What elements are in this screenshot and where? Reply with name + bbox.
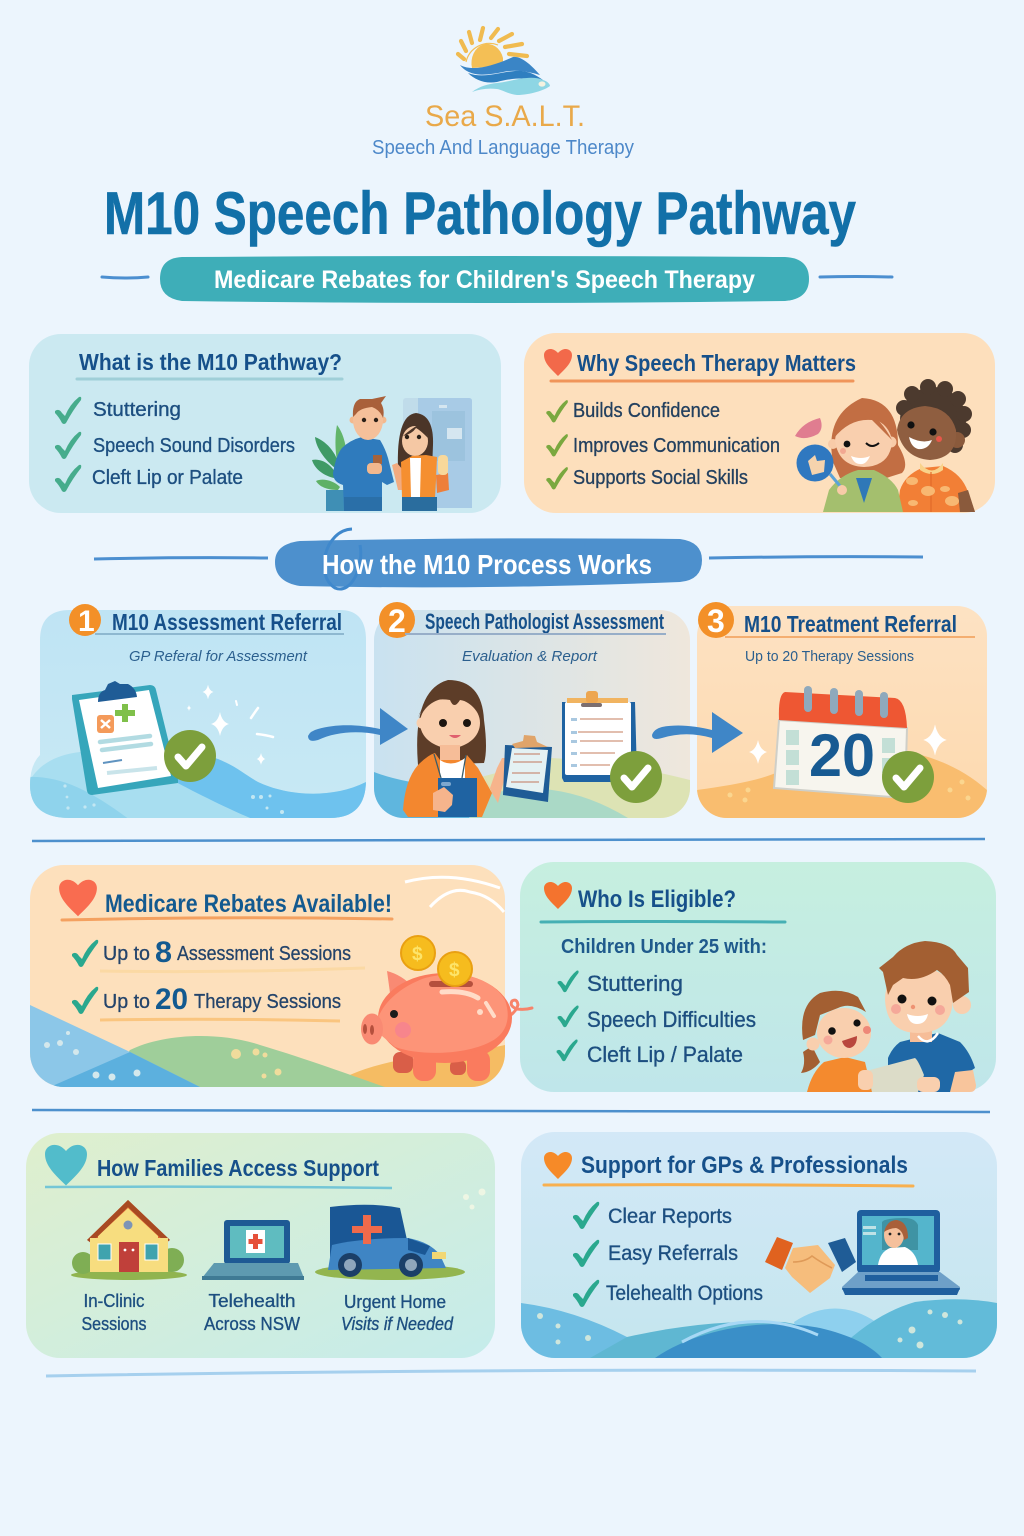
icon: small clipboard	[503, 735, 552, 802]
rebate item: therapy sessions: Up to	[103, 991, 150, 1013]
number badge	[379, 602, 415, 639]
checklist: Builds Confidence	[573, 400, 720, 422]
illustration: piggy bank with coins: $	[412, 944, 423, 965]
panel: what is the M10 pathway	[29, 334, 501, 513]
label	[82, 1291, 146, 1334]
subtext: Evaluation & Report	[462, 648, 598, 665]
illustration: handshake and telehealth laptop	[765, 1210, 960, 1295]
section heading: how the M10 process works: How the M10 Process Works	[322, 549, 652, 580]
panel: step 1	[25, 604, 366, 820]
panel: why speech therapy matters	[524, 333, 995, 513]
checklist	[55, 397, 295, 492]
section heading: how the M10 process works	[275, 529, 702, 589]
subtitle banner	[160, 256, 809, 303]
rebate item: assessment sessions: Up to	[103, 943, 150, 965]
rebate item: assessment sessions	[72, 936, 351, 969]
icon: heart	[544, 1152, 572, 1179]
icon: heart	[544, 882, 572, 909]
illustration: piggy bank with coins: $	[449, 960, 460, 981]
checklist: Telehealth Options	[606, 1282, 763, 1305]
number badge: 3	[707, 603, 725, 639]
brand tagline: Speech And Language Therapy	[372, 137, 634, 159]
icon: heart	[45, 1145, 87, 1186]
icon: calendar: 20	[809, 722, 875, 789]
panel: how families access support	[26, 1133, 495, 1358]
illustration: piggy bank with coins	[361, 936, 532, 1081]
checklist: Stuttering	[587, 971, 683, 996]
label	[204, 1291, 300, 1334]
lead text: Children Under 25 with:	[561, 936, 767, 958]
checklist: Speech Difficulties	[587, 1007, 756, 1032]
heading: How Families Access Support	[97, 1155, 379, 1181]
checklist: Improves Communication	[573, 435, 780, 457]
panel: step 2	[374, 602, 690, 818]
icon: sun and fish logo	[458, 28, 550, 95]
number badge	[69, 604, 101, 638]
heading: Speech Pathologist Assessment	[425, 609, 664, 634]
rebate item: assessment sessions: Assessment Sessions	[177, 943, 351, 965]
illustration: boy and girl with tablet	[801, 941, 976, 1092]
icon: large clipboard	[562, 691, 637, 782]
checklist: Clear Reports	[608, 1205, 732, 1228]
illustration: two smiling children	[795, 379, 975, 512]
subtext: GP Referal for Assessment	[129, 648, 308, 665]
rebate item: therapy sessions: 20	[155, 983, 188, 1016]
checklist: Stuttering	[93, 399, 181, 421]
option: telehealth	[202, 1220, 304, 1334]
icon: green check badge	[882, 751, 934, 803]
checklist: Easy Referrals	[608, 1242, 738, 1265]
rebate item: assessment sessions: 8	[155, 936, 172, 969]
heading: What is the M10 Pathway?	[79, 349, 342, 375]
checklist: Speech Sound Disorders	[93, 435, 295, 457]
rebate item: therapy sessions	[72, 983, 341, 1016]
heading: Support for GPs & Professionals	[581, 1152, 908, 1179]
icon: heart	[544, 349, 572, 376]
icon: clipboard	[72, 681, 178, 795]
option: in-clinic sessions	[71, 1200, 187, 1334]
heading: M10 Treatment Referral	[744, 611, 957, 637]
number badge: 2	[388, 603, 406, 639]
arrow: step 2 to 3	[652, 712, 743, 753]
checklist: Cleft Lip or Palate	[92, 467, 243, 489]
rebate item: therapy sessions: Therapy Sessions	[194, 991, 341, 1013]
label: Visits if Needed	[341, 1314, 454, 1334]
icon: house	[71, 1200, 187, 1280]
panel: who is eligible	[520, 862, 996, 1092]
brand name: Sea S.A.L.T.	[425, 100, 585, 133]
heading: M10 Assessment Referral	[112, 609, 342, 635]
checklist	[557, 970, 756, 1067]
panel: step 3	[697, 602, 987, 818]
icon: calendar	[774, 686, 907, 798]
label: In-Clinic	[84, 1291, 144, 1311]
label: Across NSW	[204, 1314, 300, 1334]
label	[341, 1292, 454, 1334]
number badge	[698, 602, 734, 639]
sparkles	[187, 685, 273, 765]
icon: laptop	[202, 1220, 304, 1280]
icon: van	[315, 1205, 465, 1280]
illustration: speech pathologist	[403, 680, 512, 817]
heading: Why Speech Therapy Matters	[577, 350, 856, 376]
option: urgent home visits	[315, 1205, 465, 1334]
checklist: Cleft Lip / Palate	[587, 1042, 743, 1067]
illustration: adults at clinic door	[312, 396, 472, 511]
number badge: 1	[78, 605, 95, 638]
panel: support for GPs and professionals	[521, 1132, 997, 1358]
label: Urgent Home	[344, 1292, 446, 1312]
sparkles	[749, 724, 947, 764]
logo	[372, 28, 634, 159]
checklist: Supports Social Skills	[573, 467, 748, 489]
label: Sessions	[82, 1314, 146, 1334]
checklist	[546, 400, 780, 489]
checklist	[573, 1202, 763, 1307]
icon: green check badge	[164, 730, 216, 782]
icon: heart	[59, 880, 97, 916]
subtext: Up to 20 Therapy Sessions	[745, 648, 914, 665]
heading: Medicare Rebates Available!	[105, 890, 392, 918]
heading: Who Is Eligible?	[578, 886, 736, 913]
icon: green check badge	[610, 751, 662, 803]
label: Telehealth	[208, 1291, 296, 1311]
panel: medicare rebates	[30, 865, 532, 1087]
title: M10 Speech Pathology Pathway	[104, 180, 857, 247]
subtitle banner: Medicare Rebates for Children's Speech Therapy	[214, 266, 755, 294]
arrow: step 1 to 2	[308, 708, 408, 745]
